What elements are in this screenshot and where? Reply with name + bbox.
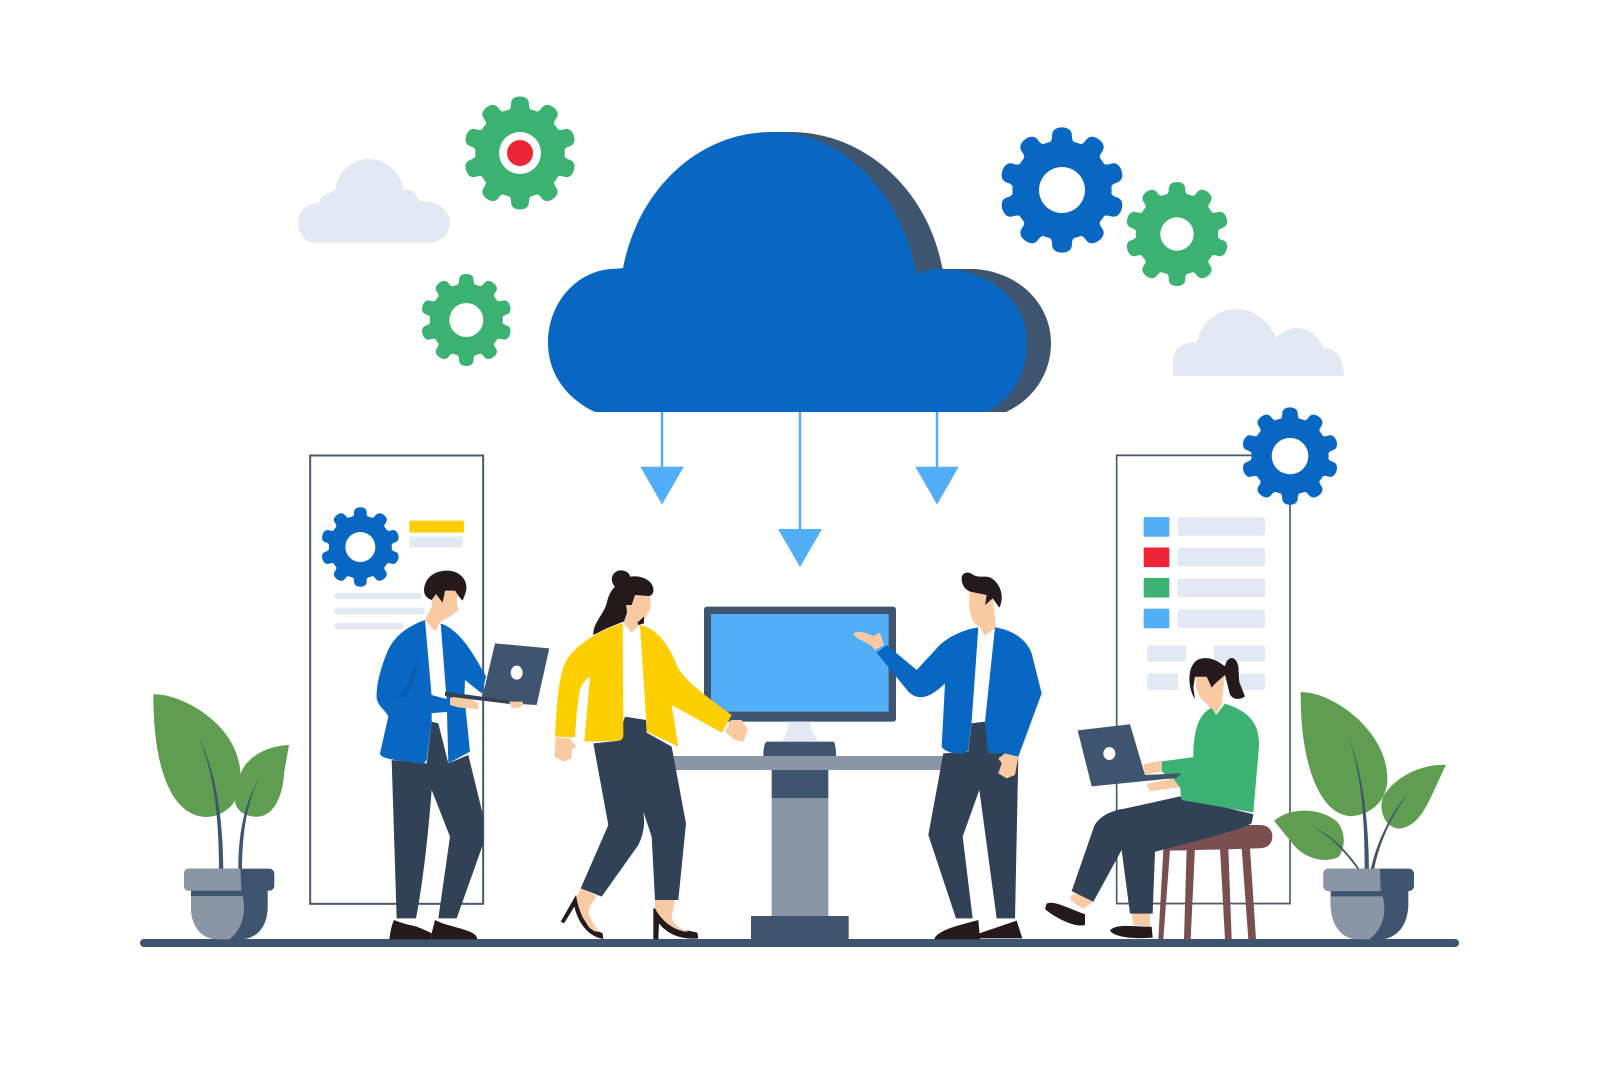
monitor [704,607,896,757]
gear: green right [1123,182,1231,286]
person: man with laptop [377,571,549,939]
right scene [1045,407,1446,939]
gear: green with red centre [462,96,578,210]
person: presenter [853,573,1042,939]
left scene [153,455,549,939]
arrow: left [640,412,684,504]
panel: left document [310,455,483,904]
arrow: centre [778,412,822,567]
table [673,756,945,940]
panel: right list document [1117,455,1290,904]
plant: right [1274,692,1446,939]
stool [1158,825,1272,939]
cloud: small right [1173,309,1344,376]
person: seated woman with laptop [1045,658,1259,938]
gear: large blue [997,127,1127,253]
plant: left [153,694,289,939]
person: woman in yellow jacket [554,570,748,939]
large cloud [548,132,1051,412]
gear: panel gear [319,507,401,587]
arrow: right [915,412,959,504]
cloud: small left [298,159,450,243]
gear: panel corner [1240,407,1340,505]
centre scene [554,570,1042,940]
ground line [140,939,1459,947]
gear: small green [419,274,514,366]
